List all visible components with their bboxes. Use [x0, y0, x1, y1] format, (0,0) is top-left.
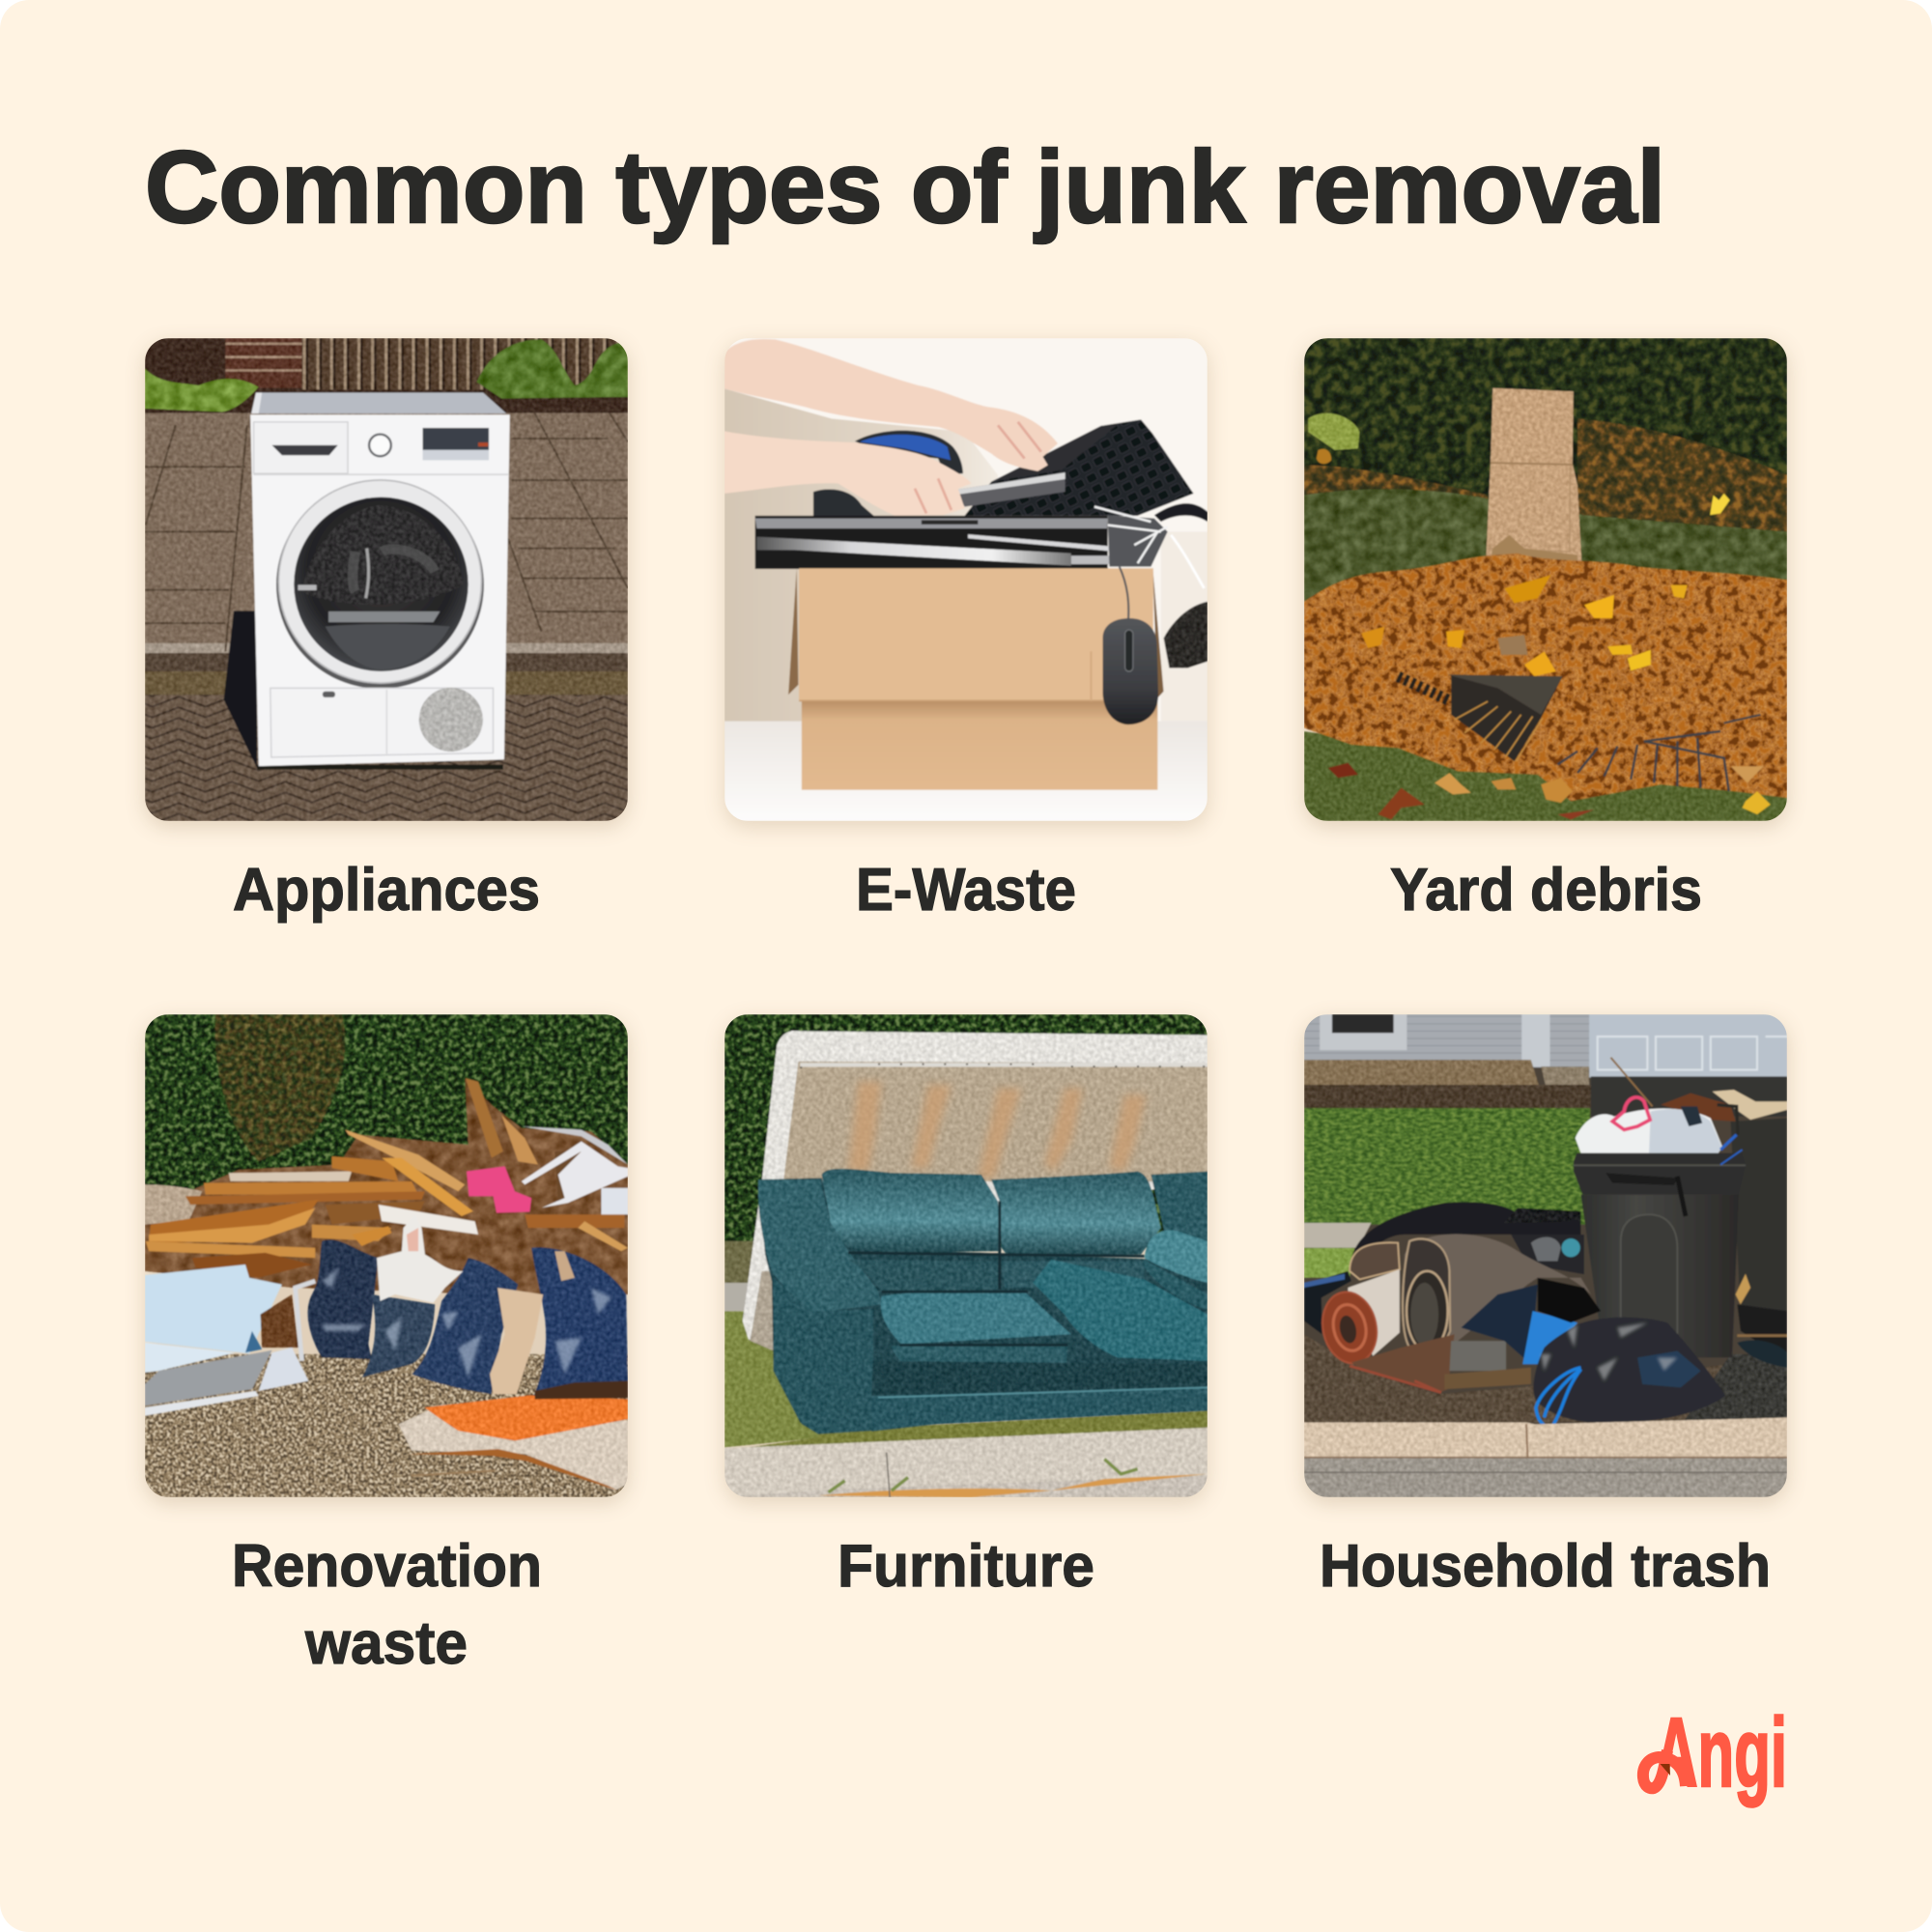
paper bag: [1486, 388, 1582, 564]
label: renovation waste: waste: [304, 1610, 468, 1677]
house: [1304, 1014, 1787, 1067]
label: renovation waste: [232, 1533, 542, 1677]
tablet: [954, 472, 1065, 507]
arm: [758, 1179, 882, 1313]
keyboard: [965, 419, 1194, 516]
rake: [1398, 674, 1563, 761]
arm: upper: [724, 339, 1058, 471]
label: e-waste: E-Waste: [856, 857, 1076, 923]
white plastic bag: [377, 1214, 464, 1303]
white frame: [522, 1142, 628, 1208]
curb and road: [1304, 1417, 1787, 1458]
photo: couch and mattress on the curb: [724, 1014, 1208, 1497]
seat back: [848, 1260, 998, 1292]
sidewalk and low ground: [1304, 1223, 1372, 1248]
sidewalk strip: [724, 1241, 764, 1285]
lawn: [724, 1311, 825, 1447]
panel: yard debris: [1304, 338, 1787, 827]
bright leaves: [1361, 575, 1688, 676]
left blue scrap: [1304, 1271, 1351, 1334]
photo: trash bins at the curb: [1304, 1014, 1787, 1497]
back cushions: [1151, 1172, 1208, 1241]
shadow: [224, 611, 257, 768]
lawn: [1304, 1108, 1590, 1225]
seat cushions: [881, 1291, 1071, 1345]
pink scrap: [467, 1166, 531, 1213]
mouse: [1103, 618, 1158, 724]
metal rod: [260, 1294, 298, 1348]
photo: leaf pile and paper bag: [1304, 338, 1787, 821]
side headphones: [1164, 602, 1208, 668]
base: [871, 1361, 1208, 1396]
white trash bag: [1576, 1109, 1722, 1154]
title: Common types of junk removal: [145, 130, 1665, 244]
mattress: [743, 1031, 1208, 1350]
panel: furniture: [724, 1014, 1208, 1503]
gravel ground: [145, 1354, 628, 1497]
panel: appliances: [145, 338, 628, 827]
cardboard box: [788, 568, 798, 695]
label: appliances: Appliances: [233, 857, 540, 923]
label: yard debris: Yard debris: [1390, 857, 1702, 923]
machine body: [250, 414, 510, 766]
cardboard scrap: [490, 1288, 543, 1394]
sofa body: [758, 1169, 1208, 1435]
lower lawn: [1304, 731, 1787, 821]
blue bags: [308, 1239, 628, 1401]
mulch: [1304, 1085, 1592, 1115]
grey boards: [145, 1350, 272, 1406]
machine top: [251, 392, 506, 413]
door: [275, 539, 485, 688]
laptops: [755, 516, 1108, 569]
black bin: [1581, 1195, 1739, 1357]
photo: construction debris: [145, 1014, 628, 1497]
panel: e-waste: [724, 338, 1208, 827]
carpet flat: [1351, 1334, 1455, 1393]
shrubs: [145, 339, 628, 412]
black trash bag: [1533, 1318, 1725, 1423]
panel: household trash: [1304, 1014, 1787, 1503]
lower panel: [270, 688, 494, 757]
lumber pile: [145, 1078, 628, 1294]
fence and wall: [145, 338, 628, 412]
blue insulation board: [145, 1264, 282, 1353]
blue tie: [1536, 1368, 1581, 1427]
label: furniture: Furniture: [838, 1533, 1094, 1600]
hose and tubes: [1351, 1202, 1581, 1274]
photo: electronics on cardboard box: [724, 338, 1208, 821]
debris on back bin: [1661, 1094, 1736, 1122]
mattress stains: [848, 1082, 1146, 1178]
logo: Angi: Angi: [1655, 1699, 1787, 1807]
second rake: [1557, 715, 1760, 791]
bright shrub: [1308, 413, 1360, 450]
wood lath: [409, 1449, 618, 1491]
logo: Angi: [1642, 1699, 1787, 1807]
pale board: [398, 1405, 628, 1491]
scattered leaves: [1328, 494, 1771, 819]
orange sheet: [424, 1395, 628, 1440]
arm: lower: [724, 431, 972, 516]
leaf pile: [1304, 554, 1787, 801]
label: renovation waste: Renovation: [232, 1533, 542, 1600]
blue headphones: [855, 431, 963, 475]
panel: renovation waste: [145, 1014, 628, 1503]
photo: washing machine on pavement: [145, 338, 628, 821]
carpet rolls: [1350, 1242, 1400, 1279]
label: household trash: Household trash: [1320, 1533, 1771, 1600]
back bin: [1730, 1118, 1787, 1315]
curb: [724, 1428, 1208, 1497]
